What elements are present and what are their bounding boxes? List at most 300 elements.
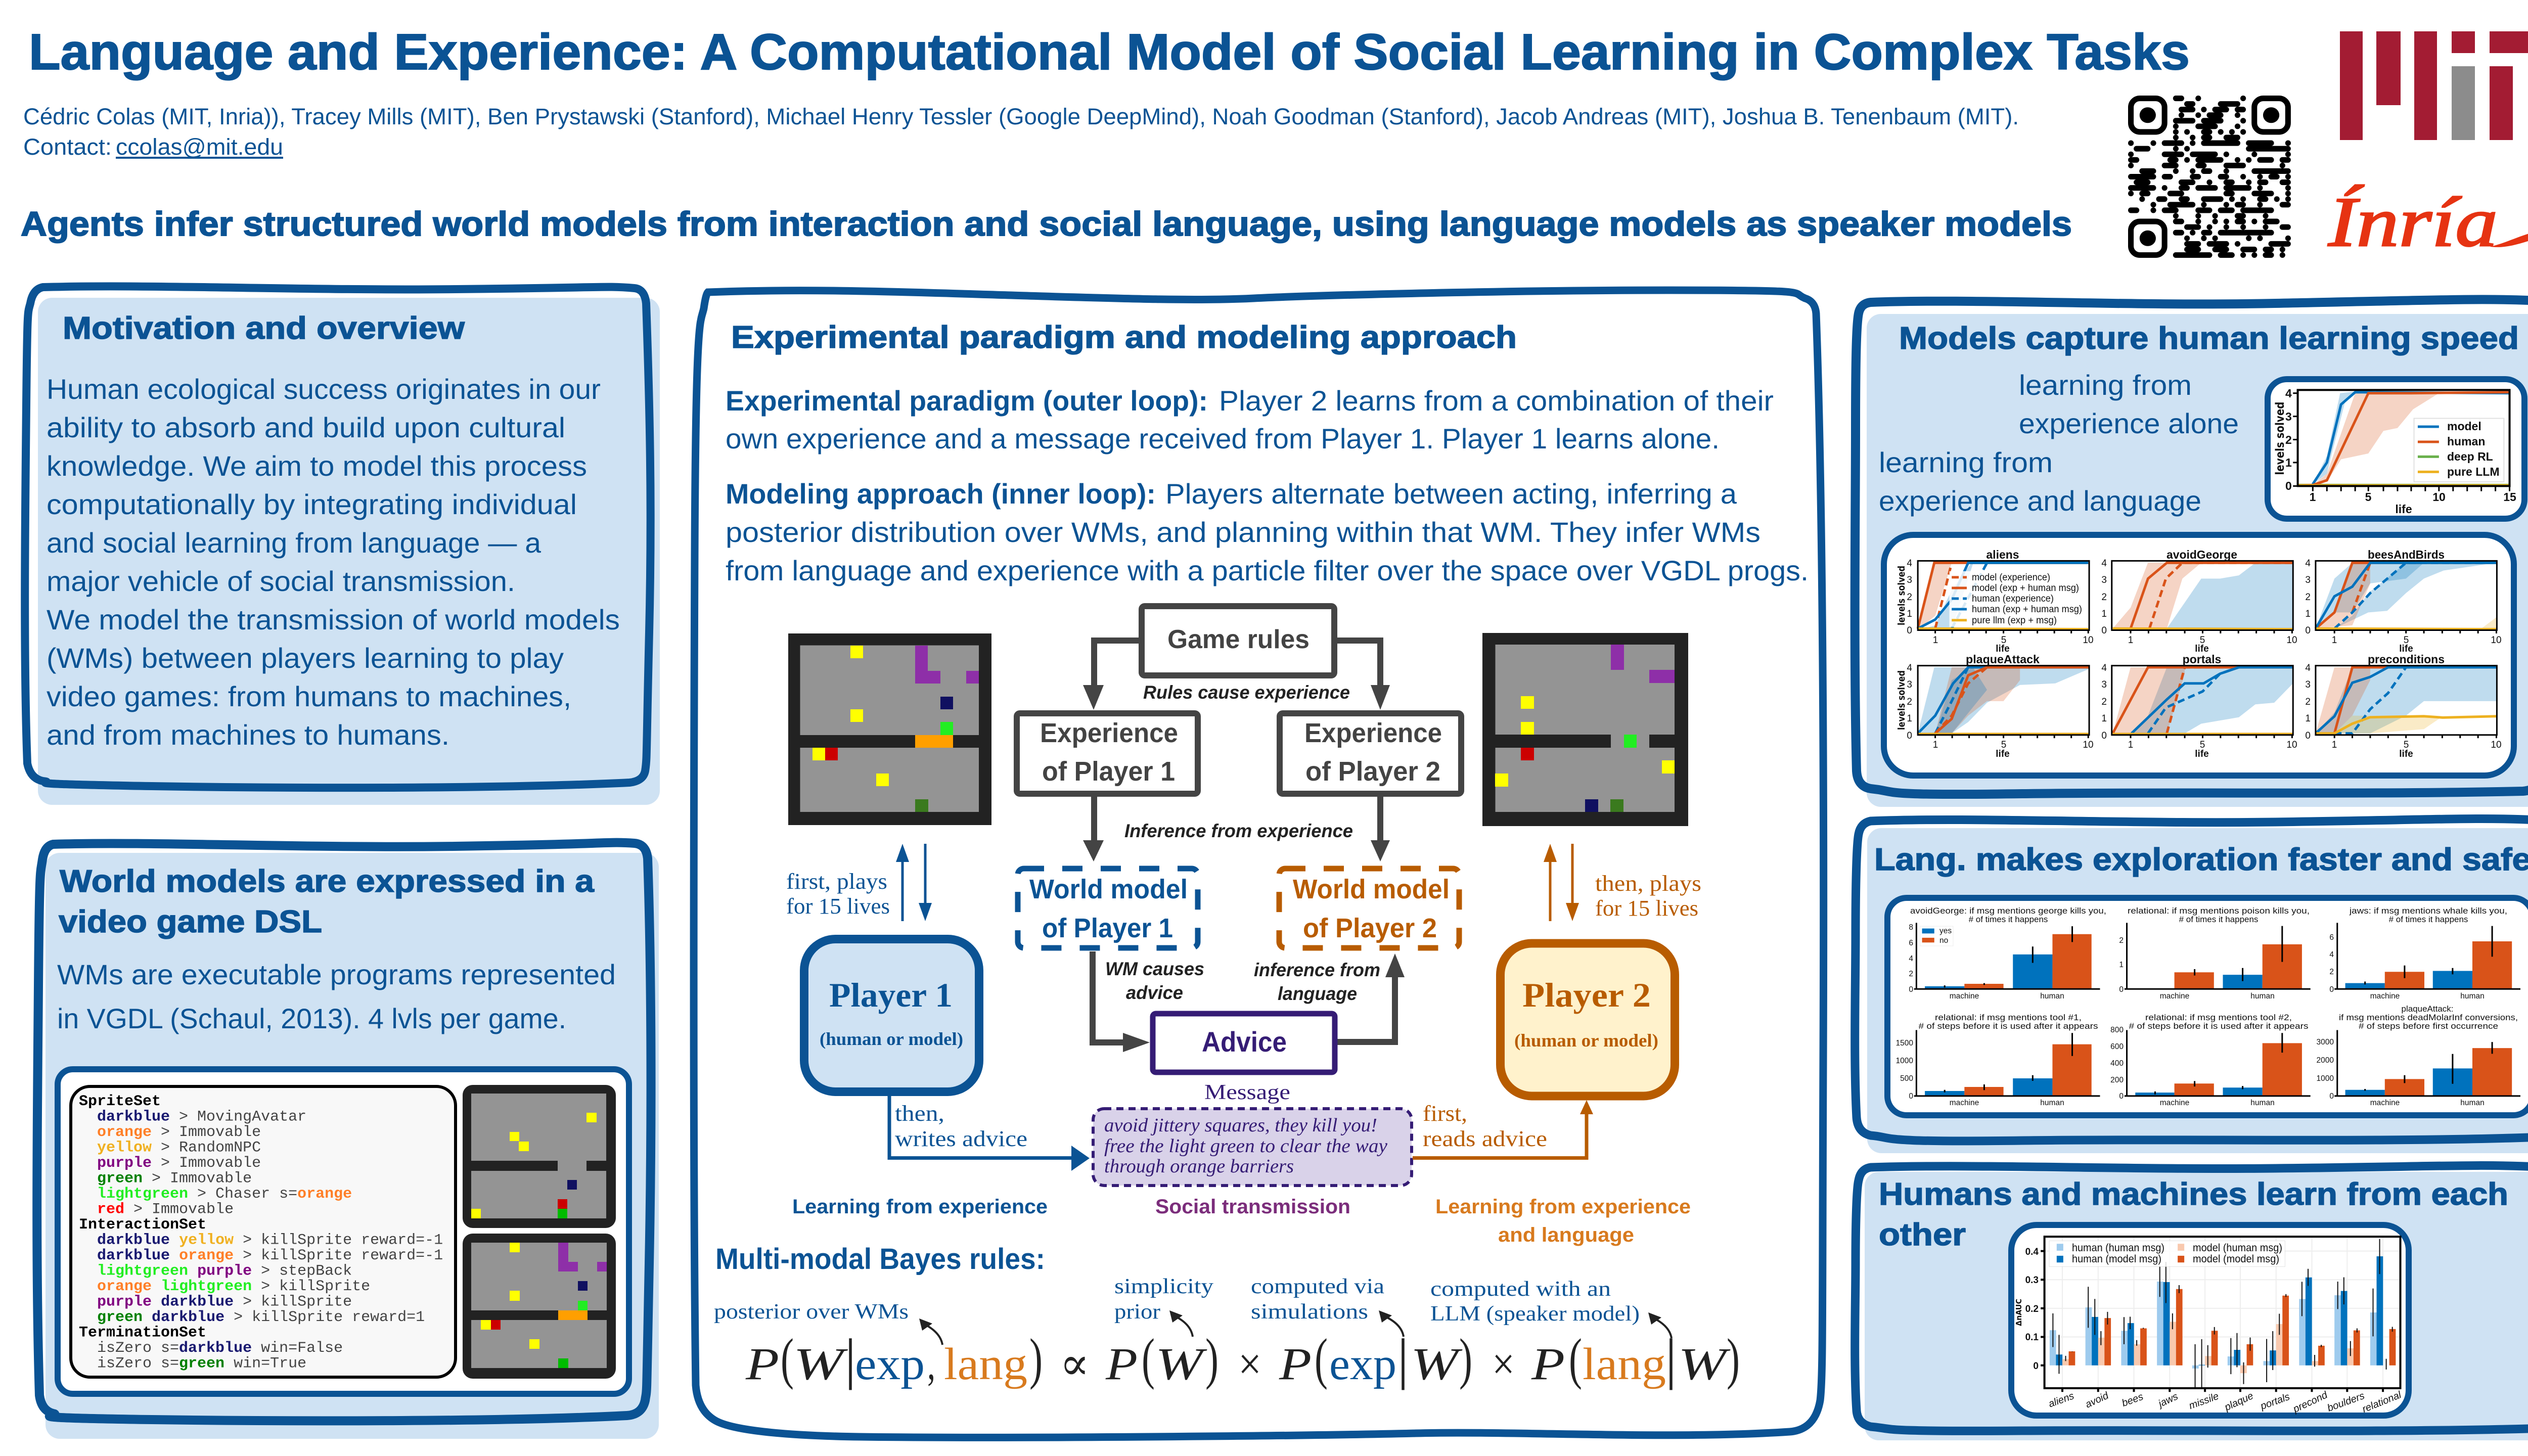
box: message content bbox=[1093, 1109, 1412, 1186]
chart: overall levels solved bbox=[2268, 379, 2524, 519]
box: player 2: Player 2 bbox=[1522, 976, 1651, 1014]
chart: portals bbox=[2112, 666, 2293, 735]
code listing: VGDL: orange lightgreen > killSprite bbox=[79, 1278, 370, 1295]
text block: paradigm: Player 2 learns from a combination of their bbox=[1219, 385, 1774, 417]
chart labels: delta nAUC: precond bbox=[2291, 1389, 2330, 1415]
text block: learning labels: learning from bbox=[1879, 446, 2053, 478]
text block: paradigm: Players alternate between acting, inferring a bbox=[1165, 478, 1737, 510]
formula: Bayes rule: ( bbox=[1142, 1328, 1155, 1390]
game screenshot: player 2 bbox=[1482, 633, 1688, 826]
box: world model of player 1: of Player 1 bbox=[1042, 913, 1173, 943]
contact bbox=[23, 134, 283, 160]
chart labels: exploration: 6 bbox=[2329, 933, 2334, 942]
chart labels: per-game: 5 bbox=[2404, 740, 2409, 750]
label: inference from language bbox=[1254, 960, 1380, 1004]
heading: humans and machines: Humans and machines learn from each bbox=[1879, 1177, 2508, 1212]
box: message content: free the light green to clear the way bbox=[1104, 1135, 1387, 1157]
formula: Bayes rule: × bbox=[1492, 1339, 1515, 1389]
chart labels: exploration: # of steps before it is used after it appears bbox=[2129, 1021, 2309, 1031]
annotation: simplicity prior bbox=[1114, 1275, 1213, 1324]
text block: world models body: in VGDL (Schaul, 2013). 4 lvls per game. bbox=[57, 1003, 566, 1034]
chart labels: exploration: 2 bbox=[2119, 936, 2124, 945]
chart labels: per-game: life bbox=[1996, 644, 2010, 654]
text block: motivation body: (WMs) between players learning to play bbox=[47, 642, 564, 674]
chart labels: exploration: relational: if msg mentions poison kills you, bbox=[2128, 906, 2310, 916]
text block: motivation body: ability to absorb and build upon cultural bbox=[47, 412, 565, 443]
panel: language makes exploration faster and safer bbox=[1855, 818, 2528, 1153]
box: experience of player 1: of Player 1 bbox=[1042, 756, 1175, 787]
chart: preconditions bbox=[2316, 666, 2497, 735]
formula: Bayes rule: W bbox=[1678, 1339, 1731, 1389]
label: first reads advice: reads advice bbox=[1423, 1126, 1547, 1151]
chart labels: delta nAUC: 0.2 bbox=[2025, 1304, 2039, 1314]
text block: learning labels: learning from bbox=[2019, 369, 2192, 401]
panel: motivation and overview bbox=[25, 286, 660, 805]
annotation arrows bbox=[919, 1310, 1672, 1345]
annotation: simplicity prior: prior bbox=[1114, 1300, 1160, 1324]
chart labels: exploration: 0 bbox=[2329, 985, 2334, 994]
chart: aliens bbox=[1918, 561, 2089, 630]
box: player 1 bbox=[804, 939, 979, 1092]
chart labels: per-game: 1 bbox=[2305, 609, 2311, 619]
chart labels: per-game: levels solved bbox=[1896, 670, 1907, 730]
chart labels: deep RL bbox=[2447, 450, 2493, 463]
chart labels: per-game: life bbox=[1996, 749, 2010, 759]
chart labels: per-game: 2 bbox=[2101, 592, 2107, 603]
heading: humans and machines bbox=[1879, 1177, 2508, 1252]
text block: paradigm bbox=[726, 385, 1809, 586]
box: experience of player 2: Experience bbox=[1304, 718, 1442, 748]
chart labels: delta nAUC: portals bbox=[2259, 1391, 2291, 1412]
chart labels: delta nAUC: human (human msg) bbox=[2072, 1242, 2164, 1254]
chart labels: per-game: human (exp + human msg) bbox=[1972, 604, 2082, 615]
annotation: computed with LLM bbox=[1430, 1278, 1640, 1326]
chart labels: per-game: 1 bbox=[1933, 635, 1938, 646]
box: player 1: Player 1 bbox=[829, 976, 953, 1014]
bars: model (model msg) bbox=[2069, 1289, 2396, 1366]
chart labels: exploration: relational: if msg mentions tool #2, bbox=[2145, 1013, 2292, 1022]
text block: world models body: WMs are executable programs represented bbox=[57, 959, 616, 990]
box: advice bbox=[1153, 1014, 1335, 1072]
text block: paradigm: from language and experience with a particle filter over the space over VGDL progs. bbox=[726, 555, 1809, 586]
chart labels: per-game: 1 bbox=[1907, 713, 1912, 724]
text block: motivation body: We model the transmission of world models bbox=[47, 604, 620, 635]
formula: Bayes rule: ( bbox=[1569, 1328, 1582, 1390]
code listing: VGDL: green > Immovable bbox=[79, 1170, 252, 1187]
chart labels: per-game: 2 bbox=[1907, 697, 1912, 707]
panel: models capture learning speed bbox=[1855, 299, 2528, 807]
formula: Bayes rule: | bbox=[1665, 1328, 1677, 1390]
chart labels: exploration: 1500 bbox=[1896, 1039, 1913, 1048]
label: inference from experience: Inference from experience bbox=[1124, 821, 1353, 841]
box: world model of player 2: of Player 2 bbox=[1303, 913, 1437, 943]
chart labels: per-game: 0 bbox=[2305, 625, 2311, 636]
chart labels: per-game: life bbox=[2399, 749, 2413, 759]
chart labels: per-game: 1 bbox=[2332, 740, 2337, 750]
chart labels: per-game: 4 bbox=[1907, 663, 1912, 673]
chart labels: exploration: 200 bbox=[2110, 1076, 2124, 1084]
chart labels: per-game bbox=[1896, 548, 2502, 759]
chart labels: per-game: 0 bbox=[2101, 731, 2107, 741]
heading: motivation: Motivation and overview bbox=[63, 311, 465, 346]
chart labels: exploration: human bbox=[2040, 992, 2064, 1000]
authors: Cédric Colas (MIT, Inria)), Tracey Mills (MIT), Ben Prystawski (Stanford), Michael Henry Tessler (Google DeepMind), Noah Goodman (Stanford), Jacob Andreas (MIT), Joshua B. Tenenbaum (MIT). bbox=[23, 104, 2019, 129]
chart labels: per-game: pure llm (exp + msg) bbox=[1972, 615, 2057, 626]
label: inference from language: inference from bbox=[1254, 960, 1380, 980]
chart labels: per-game: human (experience) bbox=[1972, 594, 2054, 604]
box: player 2: (human or model) bbox=[1514, 1030, 1658, 1051]
chart labels: per-game: 2 bbox=[2101, 697, 2107, 707]
chart labels: exploration: if msg mentions deadMolarInf conversions, bbox=[2339, 1013, 2518, 1022]
chart labels: 5 bbox=[2365, 490, 2372, 504]
arrow: player 2 reads advice bbox=[1413, 1100, 1593, 1158]
chart labels: per-game: 4 bbox=[2305, 558, 2311, 569]
chart labels: exploration: human bbox=[2040, 1099, 2064, 1107]
label: then writes advice bbox=[895, 1101, 1027, 1151]
box: message content: avoid jittery squares, they kill you! bbox=[1104, 1115, 1377, 1136]
text block: world models body bbox=[57, 959, 616, 1034]
contact: ccolas@mit.edu bbox=[116, 134, 283, 160]
formula: Bayes rule: exp bbox=[1329, 1339, 1396, 1389]
label: first reads advice: first, bbox=[1423, 1101, 1467, 1126]
chart labels: delta nAUC: 0 bbox=[2033, 1361, 2039, 1372]
chart labels: per-game: avoidGeorge bbox=[2166, 548, 2237, 561]
code listing: VGDL: purple darkblue > killSprite bbox=[79, 1293, 352, 1310]
panel: humans and machines learn from each other bbox=[1855, 1165, 2528, 1440]
chart labels: delta nAUC: model (human msg) bbox=[2193, 1242, 2282, 1254]
formula: Bayes rule: W bbox=[1411, 1339, 1463, 1389]
text block: paradigm: Modeling approach (inner loop): bbox=[726, 478, 1156, 510]
bars: yes bbox=[1925, 954, 2472, 1096]
chart labels: exploration: 1000 bbox=[2317, 1074, 2334, 1083]
chart labels: exploration: yes bbox=[1939, 927, 1952, 935]
text block: learning labels: experience and language bbox=[1879, 485, 2201, 517]
chart labels: pure LLM bbox=[2447, 465, 2500, 478]
annotation: computed via simulations: computed via bbox=[1251, 1275, 1384, 1298]
chart labels: life bbox=[2395, 503, 2412, 516]
formula: Bayes rule: exp bbox=[855, 1339, 925, 1389]
text block: motivation body bbox=[47, 373, 620, 751]
error bars bbox=[2053, 1239, 2392, 1388]
text block: learning labels bbox=[1879, 369, 2239, 517]
box: experience of player 1 bbox=[1017, 713, 1198, 794]
code listing: VGDL bbox=[71, 1086, 456, 1377]
caption: learning from experience and language: and language bbox=[1498, 1224, 1634, 1246]
annotation: computed with LLM: LLM (speaker model) bbox=[1430, 1302, 1640, 1326]
text block: motivation body: and social learning from language — a bbox=[47, 527, 541, 559]
chart panel: per-game levels solved bbox=[1884, 535, 2514, 776]
caption: learning from experience and language: Learning from experience bbox=[1435, 1196, 1691, 1218]
chart labels: per-game: plaqueAttack bbox=[1966, 653, 2040, 666]
code listing: VGDL: isZero s=darkblue win=False bbox=[79, 1340, 343, 1357]
panel: experimental paradigm bbox=[694, 290, 1824, 1437]
heading: paradigm: Experimental paradigm and modeling approach bbox=[731, 320, 1517, 355]
chart labels: per-game: 10 bbox=[2083, 635, 2094, 646]
text block: paradigm: posterior distribution over WMs, and planning within that WM. They infer WMs bbox=[726, 516, 1760, 548]
chart labels: per-game: 0 bbox=[1907, 731, 1912, 741]
chart labels: per-game: 1 bbox=[2101, 609, 2107, 619]
label: then plays bbox=[1595, 871, 1701, 921]
box: experience of player 1: Experience bbox=[1040, 718, 1178, 748]
axes bbox=[1914, 923, 2520, 1096]
chart labels: exploration: human bbox=[2250, 992, 2275, 1000]
chart labels: delta nAUC: model (model msg) bbox=[2193, 1253, 2279, 1265]
chart labels: per-game: life bbox=[2195, 644, 2209, 654]
heading: Bayes rules: Multi-modal Bayes rules: bbox=[715, 1243, 1045, 1276]
chart labels: per-game: beesAndBirds bbox=[2368, 548, 2445, 561]
logo: Inria: Ínría bbox=[2328, 183, 2498, 261]
formula: Bayes rule: P bbox=[1531, 1339, 1565, 1389]
chart labels: per-game: 4 bbox=[1907, 558, 1912, 569]
chart labels: per-game: 5 bbox=[2001, 740, 2006, 750]
formula: Bayes rule: ( bbox=[781, 1328, 794, 1390]
formula: Bayes rule: lang bbox=[1583, 1339, 1666, 1389]
contact: Contact: bbox=[23, 134, 112, 160]
label: first plays: first, plays bbox=[786, 869, 887, 894]
chart labels: exploration: 2 bbox=[2329, 968, 2334, 976]
chart labels: per-game: aliens bbox=[1986, 548, 2019, 561]
code listing: VGDL: TerminationSet bbox=[79, 1325, 206, 1342]
caption: learning from experience: Learning from experience bbox=[792, 1196, 1048, 1218]
chart labels: delta nAUC: bees bbox=[2120, 1391, 2145, 1409]
chart labels: per-game: 0 bbox=[2101, 625, 2107, 636]
bars: human (human msg) bbox=[2050, 1282, 2377, 1369]
chart labels: delta nAUC: jaws bbox=[2155, 1391, 2180, 1410]
formula: Bayes rule: W bbox=[793, 1339, 848, 1389]
chart labels: exploration: # of times it happens bbox=[2179, 915, 2258, 924]
chart labels: per-game: preconditions bbox=[2368, 653, 2445, 666]
chart labels: exploration: # of steps before it is used after it appears bbox=[1918, 1021, 2098, 1031]
heading: world models: video game DSL bbox=[59, 904, 322, 939]
arrows: player 1 plays bbox=[896, 844, 932, 921]
chart labels: exploration: avoidGeorge: if msg mentions george kills you, bbox=[1910, 906, 2106, 916]
chart labels: per-game: 1 bbox=[2332, 635, 2337, 646]
chart labels: exploration: # of steps before first occurrence bbox=[2359, 1021, 2498, 1031]
label: then plays: for 15 lives bbox=[1595, 896, 1698, 921]
heading: humans and machines: other bbox=[1879, 1217, 1966, 1252]
text block: paradigm: own experience and a message received from Player 1. Player 1 learns alone. bbox=[726, 423, 1720, 454]
chart labels: per-game: 2 bbox=[2305, 697, 2311, 707]
chart labels: exploration: 400 bbox=[2110, 1059, 2124, 1068]
code listing: VGDL: green darkblue > killSprite reward=1 bbox=[79, 1309, 425, 1326]
chart labels: exploration: relational: if msg mentions tool #1, bbox=[1935, 1013, 2082, 1022]
game screenshot: level A bbox=[463, 1085, 616, 1228]
chart labels: exploration: 0 bbox=[1909, 1092, 1913, 1101]
heading: world models bbox=[59, 864, 595, 939]
game screenshot: player 1 bbox=[788, 633, 991, 825]
heading: world models: World models are expressed in a bbox=[60, 864, 595, 899]
code listing: VGDL: darkblue yellow > killSprite reward=-1 bbox=[79, 1232, 443, 1249]
chart labels: exploration: # of times it happens bbox=[1969, 915, 2048, 924]
chart labels: 2 bbox=[2285, 433, 2292, 446]
chart labels: per-game: 3 bbox=[1907, 679, 1912, 690]
chart labels: exploration bbox=[1896, 906, 2518, 1107]
label: inference from language: language bbox=[1278, 983, 1357, 1004]
box: game rules: Game rules bbox=[1167, 625, 1310, 654]
chart labels: per-game: portals bbox=[2183, 653, 2221, 666]
chart labels: delta nAUC: boulders bbox=[2326, 1390, 2366, 1414]
chart labels: per-game: 3 bbox=[1907, 575, 1912, 585]
chart labels: per-game: 10 bbox=[2491, 740, 2502, 750]
title: Language and Experience: A Computational Model of Social Learning in Complex Tasks bbox=[29, 24, 2190, 80]
code listing: VGDL: darkblue orange > killSprite reward=-1 bbox=[79, 1247, 443, 1264]
annotation: computed with LLM: computed with an bbox=[1430, 1278, 1611, 1301]
chart labels: per-game: model (experience) bbox=[1972, 572, 2050, 583]
label: first plays: for 15 lives bbox=[786, 894, 890, 919]
chart labels: per-game: 4 bbox=[2305, 663, 2311, 673]
chart labels: model bbox=[2447, 420, 2481, 433]
code listing: VGDL: InteractionSet bbox=[79, 1216, 206, 1234]
chart labels: per-game: 0 bbox=[1907, 625, 1912, 636]
box: experience of player 2: of Player 2 bbox=[1305, 756, 1440, 787]
chart labels: exploration: 500 bbox=[1900, 1074, 1913, 1083]
chart labels: exploration: 8 bbox=[1909, 923, 1913, 932]
bars: model (human msg) bbox=[2062, 1322, 2354, 1373]
logo: MIT bbox=[2340, 31, 2528, 140]
chart labels: exploration: jaws: if msg mentions whale kills you, bbox=[2349, 906, 2507, 916]
error bars bbox=[1945, 926, 2492, 1095]
formula: Bayes rule: ) bbox=[1459, 1328, 1472, 1390]
game screenshot: level B bbox=[463, 1234, 616, 1379]
chart labels: exploration: 0 bbox=[2119, 1092, 2124, 1101]
chart labels: 1 bbox=[2285, 456, 2292, 469]
chart labels: 15 bbox=[2503, 490, 2516, 504]
chart labels: delta nAUC: relational bbox=[2361, 1389, 2403, 1415]
chart labels: exploration: 3000 bbox=[2317, 1038, 2334, 1046]
chart labels: exploration: machine bbox=[2160, 1099, 2189, 1107]
chart labels: exploration: 6 bbox=[1909, 939, 1913, 947]
chart labels: exploration: machine bbox=[1950, 992, 1979, 1000]
chart labels: delta nAUC: missile bbox=[2187, 1391, 2220, 1412]
chart labels: delta nAUC: 0.1 bbox=[2025, 1332, 2039, 1343]
formula: Bayes rule: W bbox=[1155, 1339, 1207, 1389]
chart labels: per-game: 1 bbox=[2101, 713, 2107, 724]
formula: Bayes rule: P bbox=[745, 1339, 779, 1389]
formula: Bayes rule bbox=[745, 1328, 1740, 1390]
code listing: VGDL: orange > Immovable bbox=[79, 1124, 261, 1141]
text block: motivation body: and from machines to humans. bbox=[47, 719, 449, 751]
chart labels: per-game: 3 bbox=[2305, 679, 2311, 690]
chart labels: per-game: 5 bbox=[2001, 635, 2006, 646]
label: first reads advice bbox=[1423, 1101, 1547, 1151]
chart labels: per-game: 1 bbox=[2305, 713, 2311, 724]
chart labels: per-game: 10 bbox=[2083, 740, 2094, 750]
chart: beesAndBirds bbox=[2316, 561, 2497, 630]
chart labels: exploration: human bbox=[2460, 1099, 2485, 1107]
bars: human (model msg) bbox=[2056, 1256, 2383, 1366]
heading: models: Models capture human learning speed bbox=[1899, 321, 2519, 356]
caption: social transmission: Social transmission bbox=[1155, 1196, 1350, 1218]
chart labels: per-game: 1 bbox=[2128, 635, 2133, 646]
label: WM causes advice: WM causes bbox=[1105, 959, 1204, 979]
label: then writes advice: writes advice bbox=[895, 1126, 1027, 1151]
code listing: VGDL: yellow > RandomNPC bbox=[79, 1140, 261, 1157]
chart labels: delta nAUC: avoid bbox=[2084, 1390, 2111, 1410]
chart labels: per-game: 1 bbox=[2128, 740, 2133, 750]
label: WM causes advice: advice bbox=[1126, 982, 1183, 1003]
chart labels: per-game: 3 bbox=[2101, 679, 2107, 690]
chart labels: exploration: 4 bbox=[2329, 950, 2334, 959]
chart labels: exploration: 800 bbox=[2110, 1026, 2124, 1034]
chart labels: exploration: machine bbox=[2370, 1099, 2400, 1107]
chart labels: exploration: 600 bbox=[2110, 1042, 2124, 1051]
label: WM causes advice bbox=[1105, 959, 1204, 1003]
box: player 2 bbox=[1501, 943, 1675, 1096]
chart labels: 10 bbox=[2432, 490, 2446, 504]
chart labels: 4 bbox=[2285, 387, 2292, 400]
formula: Bayes rule: | bbox=[1397, 1328, 1409, 1390]
panel: world models bbox=[37, 843, 659, 1439]
chart labels: delta nAUC bbox=[2014, 1242, 2403, 1415]
box: world model of player 1: World model bbox=[1029, 874, 1188, 904]
box: world model of player 1 bbox=[1018, 869, 1198, 948]
text block: motivation body: computationally by integrating individual bbox=[47, 488, 577, 520]
code listing: VGDL: lightgreen purple > stepBack bbox=[79, 1263, 352, 1280]
label: then plays: then, plays bbox=[1595, 871, 1701, 896]
code listing: VGDL: darkblue > MovingAvatar bbox=[79, 1108, 306, 1125]
chart labels: delta nAUC: aliens bbox=[2047, 1390, 2075, 1410]
label: first plays bbox=[786, 869, 890, 919]
box: experience of player 2 bbox=[1280, 713, 1461, 794]
chart labels: 0 bbox=[2285, 479, 2292, 492]
chart labels: per-game: 5 bbox=[2200, 635, 2205, 646]
chart labels: delta nAUC: plaque bbox=[2223, 1390, 2255, 1414]
formula: Bayes rule: P bbox=[1279, 1339, 1312, 1389]
chart labels: exploration: human bbox=[2250, 1099, 2275, 1107]
chart labels: delta nAUC: ΔnAUC bbox=[2014, 1299, 2023, 1326]
chart labels: per-game: life bbox=[2399, 644, 2413, 654]
chart labels: exploration: 2 bbox=[1909, 970, 1913, 978]
gridlines bbox=[2045, 1237, 2401, 1388]
chart labels: exploration: 1000 bbox=[1896, 1057, 1913, 1065]
chart labels: exploration: machine bbox=[2370, 992, 2400, 1000]
chart labels: exploration: no bbox=[1939, 936, 1948, 945]
formula: Bayes rule: × bbox=[1238, 1339, 1261, 1389]
label: then writes advice: then, bbox=[895, 1101, 944, 1126]
box: player 1: (human or model) bbox=[820, 1029, 963, 1049]
chart labels: exploration: 0 bbox=[2329, 1092, 2334, 1101]
text block: motivation body: video games: from humans to machines, bbox=[47, 680, 571, 712]
chart labels: per-game: 3 bbox=[2305, 575, 2311, 585]
chart labels: exploration: machine bbox=[2160, 992, 2189, 1000]
label: message: Message bbox=[1204, 1081, 1290, 1104]
code listing: VGDL: isZero s=green win=True bbox=[79, 1355, 306, 1372]
chart labels: per-game: 10 bbox=[2286, 740, 2297, 750]
code listing: VGDL: SpriteSet bbox=[79, 1093, 161, 1110]
chart labels: per-game: 3 bbox=[2101, 575, 2107, 585]
formula: Bayes rule: ) bbox=[1727, 1328, 1740, 1390]
chart labels: per-game: 2 bbox=[1907, 592, 1912, 603]
chart labels: 1 bbox=[2310, 490, 2316, 504]
caption: learning from experience and language bbox=[1435, 1196, 1691, 1246]
formula: Bayes rule: ) bbox=[1205, 1328, 1218, 1390]
chart labels: per-game: 4 bbox=[2101, 663, 2107, 673]
formula: Bayes rule: lang bbox=[944, 1339, 1027, 1389]
text block: motivation body: knowledge. We aim to model this process bbox=[47, 450, 587, 482]
chart: avoidGeorge bbox=[2112, 561, 2293, 630]
chart labels: exploration: 0 bbox=[1909, 985, 1913, 994]
arrow: player 1 writes advice bbox=[889, 1096, 1090, 1171]
code listing: VGDL: purple > Immovable bbox=[79, 1155, 261, 1172]
chart labels: exploration: 2000 bbox=[2317, 1056, 2334, 1065]
formula: Bayes rule: , bbox=[927, 1339, 935, 1389]
arrows: player 2 plays bbox=[1544, 844, 1579, 921]
formula: Bayes rule: P bbox=[1105, 1339, 1138, 1389]
chart labels bbox=[2274, 387, 2516, 516]
chart labels: exploration: 1 bbox=[2119, 961, 2124, 969]
chart labels: per-game: 2 bbox=[2305, 592, 2311, 603]
chart panel: exploration bars bbox=[1887, 898, 2528, 1115]
